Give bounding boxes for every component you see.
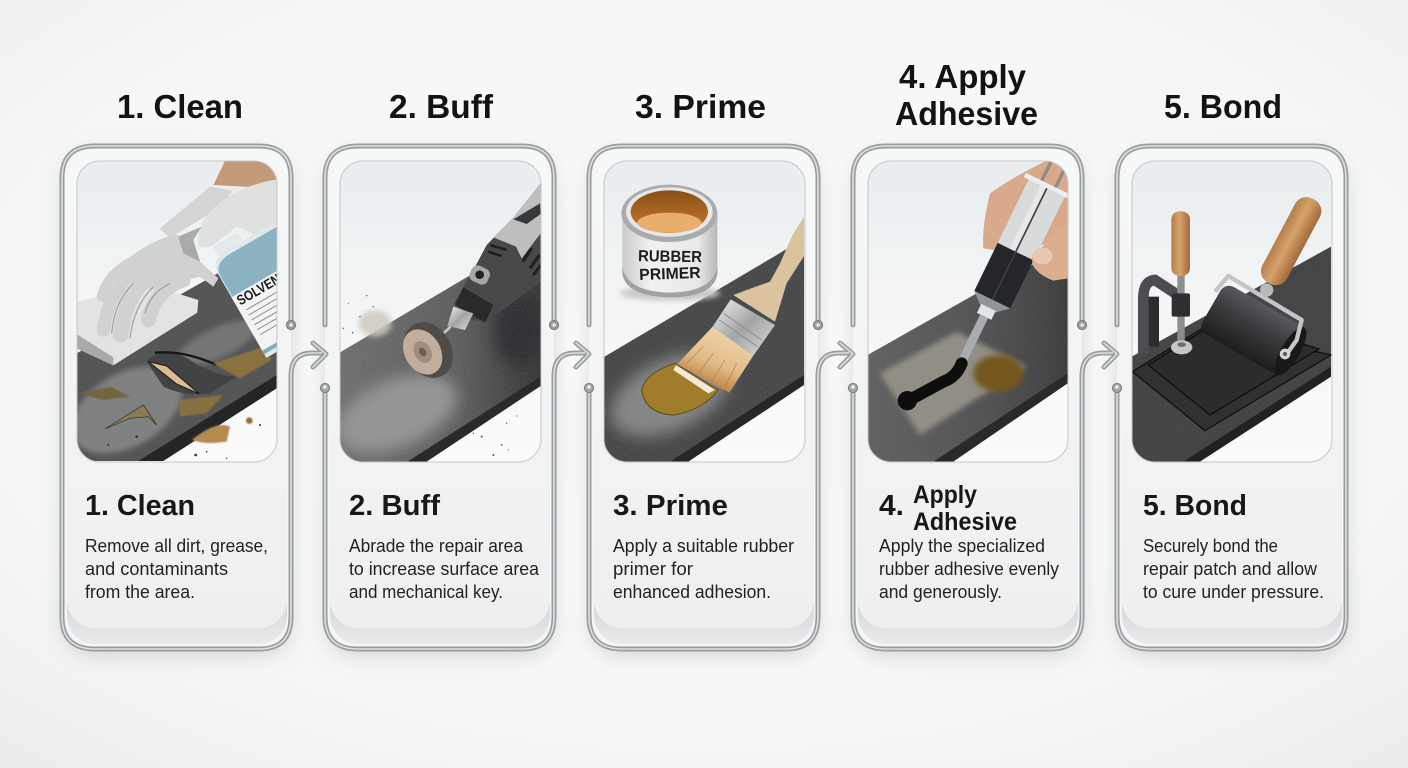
heading: 5. Bond: 5. Bond <box>1164 88 1282 125</box>
bottle label: SOLVENT <box>234 267 290 308</box>
fingers <box>1032 236 1068 281</box>
spray trigger head <box>160 187 233 238</box>
arrow: step 4 to step 5 <box>1082 343 1117 396</box>
step 2 description: and mechanical key. <box>349 582 503 602</box>
heading: 4. Apply Adhesive: 4. Apply <box>899 58 1027 95</box>
step 5 description: repair patch and allow <box>1143 559 1318 579</box>
step 4 title: 4. <box>879 490 904 522</box>
step 4 description: and generously. <box>879 582 1002 602</box>
primer can: PRIMER <box>639 265 701 284</box>
heading: 4. Apply Adhesive: Adhesive <box>895 95 1038 132</box>
step 4 title: Apply <box>913 481 977 509</box>
step 1 description: and contaminants <box>85 559 228 579</box>
heading: 3. Prime: 3. Prime <box>635 88 766 125</box>
illustration: rotary tool buffing rubber <box>340 162 540 462</box>
step 4 description: Apply the specialized <box>879 536 1045 556</box>
buffing wheel <box>404 322 453 378</box>
heading: 1. Clean: 1. Clean <box>117 88 243 125</box>
step 1 description: from the area. <box>85 582 195 602</box>
step 4 description: rubber adhesive evenly <box>879 559 1059 579</box>
panel: step 3 prime <box>584 146 823 649</box>
adhesive bead <box>908 363 962 401</box>
primer puddle <box>642 363 718 415</box>
arrow: step 1 to step 2 <box>291 343 326 396</box>
step 3 description <box>613 536 794 602</box>
syringe <box>959 162 1068 361</box>
illustration: gloved hands cleaning rubber with solvent <box>78 162 276 462</box>
panel drop shadows <box>62 152 1347 656</box>
illustration: syringe applying adhesive <box>868 162 1068 462</box>
step 3 description: primer for <box>613 559 693 579</box>
step 4 description <box>879 536 1059 602</box>
panel: step 1 clean <box>60 144 296 652</box>
brush <box>677 217 804 393</box>
step 5 title: 5. Bond <box>1143 490 1247 522</box>
panel: step 2 buff <box>320 146 559 649</box>
arrow: step 2 to step 3 <box>554 343 589 396</box>
step 2 description <box>349 536 540 602</box>
step 5 description <box>1143 536 1324 602</box>
arm <box>213 161 277 188</box>
panel: step 5 bond <box>1112 146 1346 649</box>
heading: 2. Buff: 2. Buff <box>389 88 494 125</box>
step 3 title: 3. Prime <box>613 490 728 522</box>
step 1 description: Remove all dirt, grease, <box>85 536 268 556</box>
left glove <box>102 235 218 338</box>
right glove <box>198 179 277 247</box>
primer can: RUBBER <box>638 248 703 266</box>
step 2 title: 2. Buff <box>349 490 440 522</box>
primer can <box>620 185 720 301</box>
step 1 description <box>85 536 268 602</box>
step 3 description: Apply a suitable rubber <box>613 536 794 556</box>
solvent bottle <box>214 222 276 358</box>
step 3 description: enhanced adhesion. <box>613 582 771 602</box>
panel: step 4 apply adhesive <box>848 146 1087 649</box>
hand behind syringe <box>983 161 1068 253</box>
illustration: primer can and brush <box>598 161 805 462</box>
towel <box>77 285 198 365</box>
illustration: clamp and roller bonding patch <box>1132 161 1332 462</box>
step 2 description: to increase surface area <box>349 559 540 579</box>
step 1 title: 1. Clean <box>85 490 195 522</box>
roller <box>1198 193 1326 380</box>
step 2 description: Abrade the repair area <box>349 536 524 556</box>
clamp <box>1143 211 1192 354</box>
step 4 title <box>879 481 1017 536</box>
step 4 title: Adhesive <box>913 508 1017 536</box>
heading: 4. Apply Adhesive <box>895 58 1038 132</box>
arrow: step 3 to step 4 <box>818 343 853 396</box>
rotary tool body <box>454 183 541 322</box>
step 5 description: to cure under pressure. <box>1143 582 1324 602</box>
step 5 description: Securely bond the <box>1143 536 1278 556</box>
